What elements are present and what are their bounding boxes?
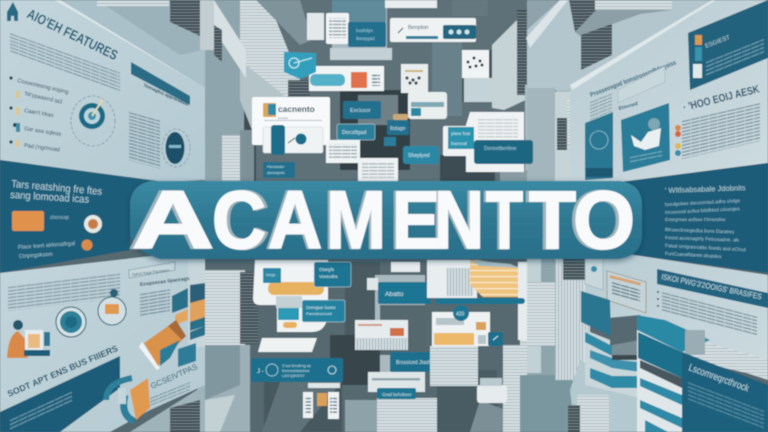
band heading: ' WItlsabsabale Jdobnits [665, 183, 746, 195]
teal small tile [263, 268, 281, 283]
note list [140, 276, 190, 316]
feature bullet list: Caan't Irkas [24, 108, 54, 119]
sub-panel label: Teenaglus appraiseals [143, 82, 190, 107]
feature bullet list [9, 76, 69, 153]
central top cards [252, 0, 533, 181]
white framed teal card: bserood [451, 141, 467, 146]
band caption: shonsap [50, 215, 69, 221]
left lower wall panel [0, 250, 205, 432]
title lettering: A [132, 175, 214, 266]
icon: orange dot [82, 240, 92, 250]
intro text lines [10, 33, 120, 92]
right lower wall and floor [520, 250, 660, 432]
central bottom cards [251, 260, 527, 419]
white flow card [253, 260, 328, 332]
info box [618, 66, 665, 103]
tiny teal tag [384, 137, 396, 146]
badge: circular [162, 129, 190, 167]
top white strip [385, 0, 437, 8]
dark teal panel [682, 352, 768, 432]
feature bullet list: Cosoestesmg eoping [17, 78, 69, 96]
icon: open box [139, 320, 186, 370]
band text rows: FunCsanaffdaretr.sbopdos [665, 251, 722, 260]
band text rows: bsedgebee derossntad adhe shrlge [665, 198, 741, 208]
white tag [367, 278, 378, 290]
teal circle badge [453, 305, 469, 321]
panel heading: Lscomreqrcthrock [687, 362, 751, 394]
icon: hands and orange card [106, 378, 150, 421]
band text rows: Fatad smigrasnatbs fioeds asd oChod [665, 243, 746, 253]
feature bullet list: Gar asa sqless [24, 126, 62, 138]
band text rows: Inosst auosnagtrly Fetsosadne, als [665, 235, 740, 244]
icon: header mark [7, 2, 18, 21]
caption lines [150, 382, 190, 406]
title lettering depth: C [215, 175, 269, 266]
teal long bar [435, 298, 525, 304]
left upper ceiling and duct [0, 0, 246, 94]
teal tile top [314, 262, 351, 287]
teal small label [387, 120, 409, 135]
teal label exclusive: Exclusor [350, 108, 371, 114]
tan accent [393, 114, 408, 120]
orange stack [470, 260, 520, 297]
orange marked list [607, 271, 646, 313]
teal tile top: Vossuths [319, 274, 338, 279]
band text rows [665, 198, 746, 260]
feature bullet list: 'Nt'ypaasrrd ta3 [24, 91, 63, 106]
band text rows: Blrsavclnsegedba bons Daratres [665, 227, 735, 235]
teal info bar: J - [257, 369, 264, 375]
white framed teal card: plave foat [451, 131, 471, 136]
teal info bar [251, 358, 343, 382]
heading: ask: · 'HOO EOIJ AESK [682, 83, 761, 114]
teal info bar: fenvrsoblasshoe [282, 369, 310, 373]
title lettering: E [392, 175, 440, 266]
white document low [358, 158, 398, 181]
teal info bar: L&S'Q8V5'97 [282, 374, 305, 378]
teal small label: Ibdage [390, 126, 406, 132]
icon: orange seal [98, 289, 126, 325]
white plate low [368, 372, 425, 392]
teal mini tile with pill [278, 308, 299, 328]
teal label abatto: Abatto [385, 291, 404, 298]
title lettering depth: A [129, 175, 211, 266]
teal card: boshdys [356, 28, 374, 33]
teal tile mid: Srengue luose [306, 305, 336, 310]
band text: Tars reatshing fre ftes [11, 179, 103, 198]
teal stack two [637, 315, 710, 432]
teal label low [377, 388, 416, 399]
large white document right [466, 112, 524, 172]
teal label wide [390, 352, 447, 372]
small document [585, 253, 603, 290]
title lettering depth: M [324, 175, 384, 266]
band text second line: sang lomooad icas [10, 190, 89, 206]
small white card [307, 13, 324, 40]
teal label destinos [337, 124, 375, 140]
title lettering depth: N [432, 175, 482, 266]
left lower dark stripes [130, 345, 240, 432]
teal tall card [585, 112, 613, 180]
right lower wall panel [585, 252, 768, 380]
white base plate [258, 338, 317, 352]
teal tile top: Otargfs [319, 267, 335, 272]
band small text two: Ctnpegskssm [19, 252, 53, 260]
panel body lines [688, 382, 764, 431]
icon: person at laptop [7, 320, 50, 358]
white dotted card right [462, 50, 489, 78]
white box low [477, 378, 507, 403]
feature bullet list: Pad j'ngrmoad [24, 143, 60, 153]
intro text lines [8, 274, 120, 311]
title lettering depth: E [390, 175, 438, 266]
mini label strip [308, 383, 340, 388]
white dotted card centre [401, 64, 428, 93]
teal feature card: ESGIEST [705, 35, 731, 50]
title lettering: N [434, 175, 484, 266]
title lettering depth: A [266, 175, 320, 266]
icon: round badge [84, 215, 102, 233]
white panel with pill [309, 66, 384, 91]
title lettering: M [326, 175, 386, 266]
central lower building [185, 258, 570, 432]
left teal band [0, 160, 165, 273]
nested white card [263, 125, 323, 155]
teal card: Ibespgad [356, 36, 375, 41]
title lettering depth [129, 175, 632, 266]
title lettering depth: T [484, 175, 521, 266]
teal card [348, 22, 386, 47]
white card with teal strip [408, 92, 447, 119]
dark teal block [0, 356, 120, 432]
teal tile mid: Pansdescnosit [306, 311, 333, 316]
list body text [682, 103, 760, 159]
title lettering depth: T [526, 175, 573, 266]
teal label destinos: Decstfgad [342, 130, 366, 136]
teal circle badge: 420 [456, 312, 465, 318]
benefits list [662, 292, 757, 337]
teal label display [403, 146, 439, 164]
logo wordmark: cacnento [278, 104, 315, 114]
wide white panel: Benpton [408, 25, 428, 31]
band text rows: Eosrgrnas aofsoe Fbrsetdne [665, 217, 726, 223]
logo subtext: prootos [278, 116, 289, 120]
teal feature card [688, 0, 768, 90]
small teal check tile [488, 332, 503, 346]
caption text: GCSEIVTPAS [149, 362, 199, 391]
title lettering: O [573, 175, 635, 266]
white stripes [690, 338, 768, 378]
left upper wall panel [0, 0, 205, 182]
white logo card [252, 97, 330, 145]
icon: swirl circle [56, 307, 86, 337]
list icons [675, 125, 681, 156]
dark teal callout: Donnetbertlew [484, 146, 517, 152]
small teal label lower left: Ptenstoder [267, 165, 285, 169]
main title banner [129, 175, 642, 266]
teal stack one [581, 291, 640, 398]
white stripes low [430, 346, 478, 386]
bar blocks [172, 283, 205, 340]
teal tile icon [284, 52, 316, 79]
teal info bar: C'ooi Dnullrng as [282, 364, 311, 368]
title lettering depth: O [570, 175, 632, 266]
teal label low: Grad behobeer [382, 392, 412, 397]
teal label display: Sheplyed [408, 153, 430, 159]
wide white panel [390, 18, 476, 42]
note list: Eosposcas lipanrags [140, 276, 190, 288]
orange button [12, 211, 44, 231]
note box: Sakut Awar Pansistor [132, 267, 170, 277]
title lettering: A [268, 175, 322, 266]
central upper building [205, 0, 570, 182]
teal main card with icon [621, 103, 670, 172]
heading: upper right: Prosseosgod bonsiroosrnBdoqoiss [589, 60, 678, 99]
heading: features: AIO'EH FEATURES [25, 6, 120, 63]
title lettering: T [486, 175, 523, 266]
dark teal callout [474, 140, 533, 164]
white document [326, 13, 349, 44]
teal header strip: ISKOI PWG'3'2OOIGS' BRASIFES [661, 272, 763, 302]
small teal tag [178, 343, 196, 367]
small teal label lower left: ateshapnts [267, 171, 285, 175]
label: Etsoned [618, 101, 639, 112]
heading: apps: SODT APT ENS BUS FIIIERS [6, 343, 119, 399]
small teal label lower left [263, 162, 295, 178]
band small text: Flace Inert alrlonatfrgal [18, 241, 75, 251]
title lettering: C [212, 175, 266, 266]
teal label wide: Brsssiced Jtasfling [396, 360, 438, 366]
teal small tile: bsogs [266, 273, 276, 277]
note box [129, 262, 175, 278]
striped white card with orange [355, 320, 408, 350]
title lettering [132, 175, 635, 266]
white note [326, 140, 360, 163]
right teal band [620, 163, 768, 273]
white strut right [518, 262, 527, 340]
teal label abatto [378, 282, 431, 304]
teal tile mid [302, 300, 345, 322]
band text rows: Inrosnsod aofea falidbted cdoarges [665, 206, 741, 216]
sub-panel heading [131, 62, 190, 105]
white card with orange pill [432, 312, 490, 346]
right upper wall panel [570, 0, 768, 182]
icon: target [71, 96, 115, 146]
white stack with vents [427, 260, 477, 298]
title lettering: T [529, 175, 576, 266]
white framed teal card [443, 126, 476, 156]
white tag top [391, 262, 420, 272]
bullet markers [657, 291, 659, 307]
sub-panel list [129, 112, 160, 169]
mini cards [303, 392, 339, 419]
logo [263, 103, 276, 117]
right upper ceiling and ducts [526, 0, 713, 183]
side list [590, 93, 612, 120]
teal label exclusive [343, 101, 381, 119]
